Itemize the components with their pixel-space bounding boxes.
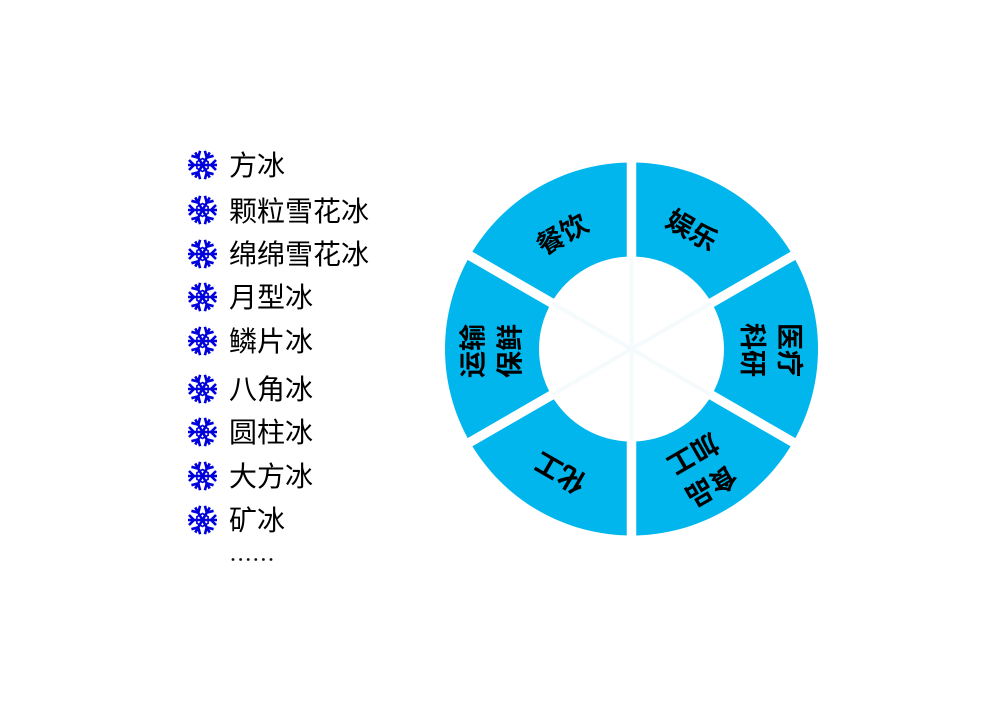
- list item: 方冰: [188, 150, 285, 181]
- list item: 月型冰: [188, 282, 313, 313]
- list item: 八角冰: [188, 374, 313, 405]
- list item: 绵绵雪花冰: 绵绵雪花冰: [229, 239, 369, 270]
- segment label: 食品加工: 食品: [680, 459, 742, 512]
- list item: 圆柱冰: 圆柱冰: [229, 417, 313, 448]
- segment label: 医疗科研: [737, 323, 804, 377]
- list item: 鳞片冰: 鳞片冰: [229, 326, 313, 357]
- application ring chart: [445, 150, 818, 548]
- list item: 圆柱冰: [188, 417, 313, 448]
- list ellipsis: ……: [229, 561, 231, 563]
- segment label: 医疗科研: 科研: [737, 323, 767, 377]
- ring base: [445, 162, 818, 536]
- list item: 大方冰: [188, 461, 313, 492]
- list item: 方冰: 方冰: [229, 150, 285, 181]
- list item: 鳞片冰: [188, 326, 313, 357]
- segment label: 医疗科研: 医疗: [774, 323, 804, 377]
- segment label: 食品加工: 加工: [662, 427, 724, 480]
- list item: 八角冰: 八角冰: [229, 374, 313, 405]
- segment label: 娱乐: 娱乐: [661, 204, 722, 257]
- segment label: 运输保鲜: 运输: [458, 324, 488, 378]
- ice type list: [188, 150, 369, 563]
- list ellipsis: [229, 558, 272, 563]
- segment label: 运输保鲜: 保鲜: [496, 324, 526, 378]
- list item: 矿冰: 矿冰: [229, 505, 285, 536]
- segment label: 化工: 化工: [530, 446, 591, 499]
- list item: 矿冰: [188, 505, 285, 536]
- list item: 颗粒雪花冰: 颗粒雪花冰: [229, 196, 369, 227]
- segment label: 餐饮: 餐饮: [532, 208, 593, 261]
- list item: 月型冰: 月型冰: [229, 282, 313, 313]
- segment label: 运输保鲜: [458, 324, 526, 378]
- segment label: 食品加工: [662, 427, 742, 512]
- list item: 大方冰: 大方冰: [229, 461, 313, 492]
